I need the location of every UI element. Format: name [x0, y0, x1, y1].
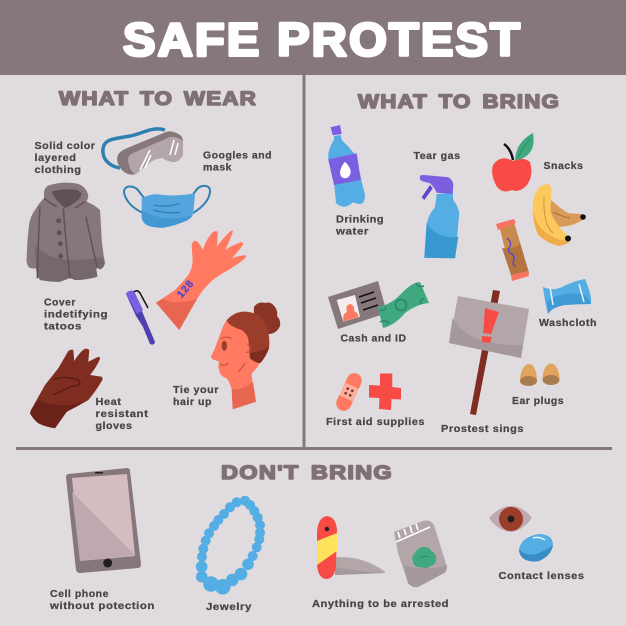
label: goggles and mask: Googles and	[203, 150, 272, 162]
icon: washcloth	[543, 279, 591, 314]
label: anything to be arrested: Anything to be arrested	[312, 599, 449, 610]
label: cash and id: Cash and ID	[340, 334, 406, 344]
label: goggles and mask	[203, 150, 272, 174]
panel: what to bring	[326, 91, 597, 435]
header band	[0, 0, 626, 75]
label: washcloth: Washcloth	[539, 318, 597, 329]
label: tie your hair up: Tie your	[173, 385, 219, 396]
label: cell phone: Cell phone	[50, 589, 109, 600]
label: heat resistant gloves	[96, 397, 149, 432]
label: cover tattoos	[44, 298, 108, 332]
label: cover tattoos: tatoos	[44, 322, 82, 332]
label: cell phone: without potection	[49, 601, 155, 612]
label: jewelry: Jewelry	[206, 602, 252, 613]
label: snacks: Snacks	[544, 161, 584, 172]
icon: cell phone	[66, 468, 141, 573]
icon: goggles	[103, 129, 183, 175]
icon: bag	[394, 520, 447, 587]
icon: spray bottle	[420, 175, 459, 258]
label: heat resistant gloves: resistant	[96, 409, 149, 420]
icon: apple	[492, 133, 534, 191]
icon: ear plugs	[520, 364, 560, 386]
label: drinking water: water	[335, 226, 369, 238]
label: tear gas: Tear gas	[414, 151, 460, 162]
icon: hand with tattoo	[156, 231, 246, 330]
label: cover tattoos: Cover	[44, 298, 76, 308]
icon: ID card	[328, 281, 387, 329]
label: cover tattoos: indetifying	[44, 310, 108, 320]
icon: heat resistant glove	[30, 349, 103, 428]
icon: marker pen	[126, 291, 155, 345]
label: protest signs: Prostest sings	[441, 424, 524, 435]
label: heat resistant gloves: gloves	[96, 421, 132, 432]
icon: jewelry necklace	[196, 496, 265, 594]
label: cell phone	[49, 589, 155, 612]
icon: first aid cross	[369, 374, 401, 410]
label: drinking water	[335, 214, 384, 238]
icon: pocket knife	[317, 516, 385, 579]
icon: cash	[378, 282, 429, 328]
icon: coat	[27, 183, 105, 282]
label: contact lenses: Contact lenses	[498, 571, 584, 582]
icon: tied-up hair head	[211, 302, 280, 409]
label: solid color clothing	[34, 141, 96, 176]
label: tie your hair up: hair up	[173, 397, 212, 408]
icon: contact lens	[519, 534, 553, 561]
icon: granola bar	[496, 219, 529, 281]
label: heat resistant gloves: Heat	[96, 397, 122, 408]
icon: bandage	[334, 371, 364, 413]
label: ear plugs: Ear plugs	[512, 396, 564, 407]
label: first aid supplies: First aid supplies	[326, 417, 425, 428]
icon: protest sign	[449, 290, 529, 415]
heading: what to wear: WHAT TO WEAR	[59, 88, 257, 110]
panel: what to wear	[27, 88, 280, 432]
label: solid color clothing: layered	[34, 153, 76, 164]
panel: don't bring	[49, 462, 584, 613]
label: solid color clothing: Solid color	[34, 141, 96, 152]
tattoo number: 128	[175, 278, 197, 301]
label: drinking water: Drinking	[336, 214, 384, 226]
heading: don't bring: DON'T BRING	[221, 462, 393, 484]
icon: bananas	[533, 184, 586, 246]
icon: face mask	[124, 186, 210, 228]
title: SAFE PROTEST	[123, 14, 522, 66]
label: tie your hair up	[173, 385, 219, 408]
label: solid color clothing: clothing	[34, 165, 82, 176]
icon: water bottle	[328, 125, 365, 207]
heading: what to bring: WHAT TO BRING	[358, 91, 560, 113]
label: goggles and mask: mask	[203, 162, 232, 174]
icon: eye	[489, 506, 532, 532]
